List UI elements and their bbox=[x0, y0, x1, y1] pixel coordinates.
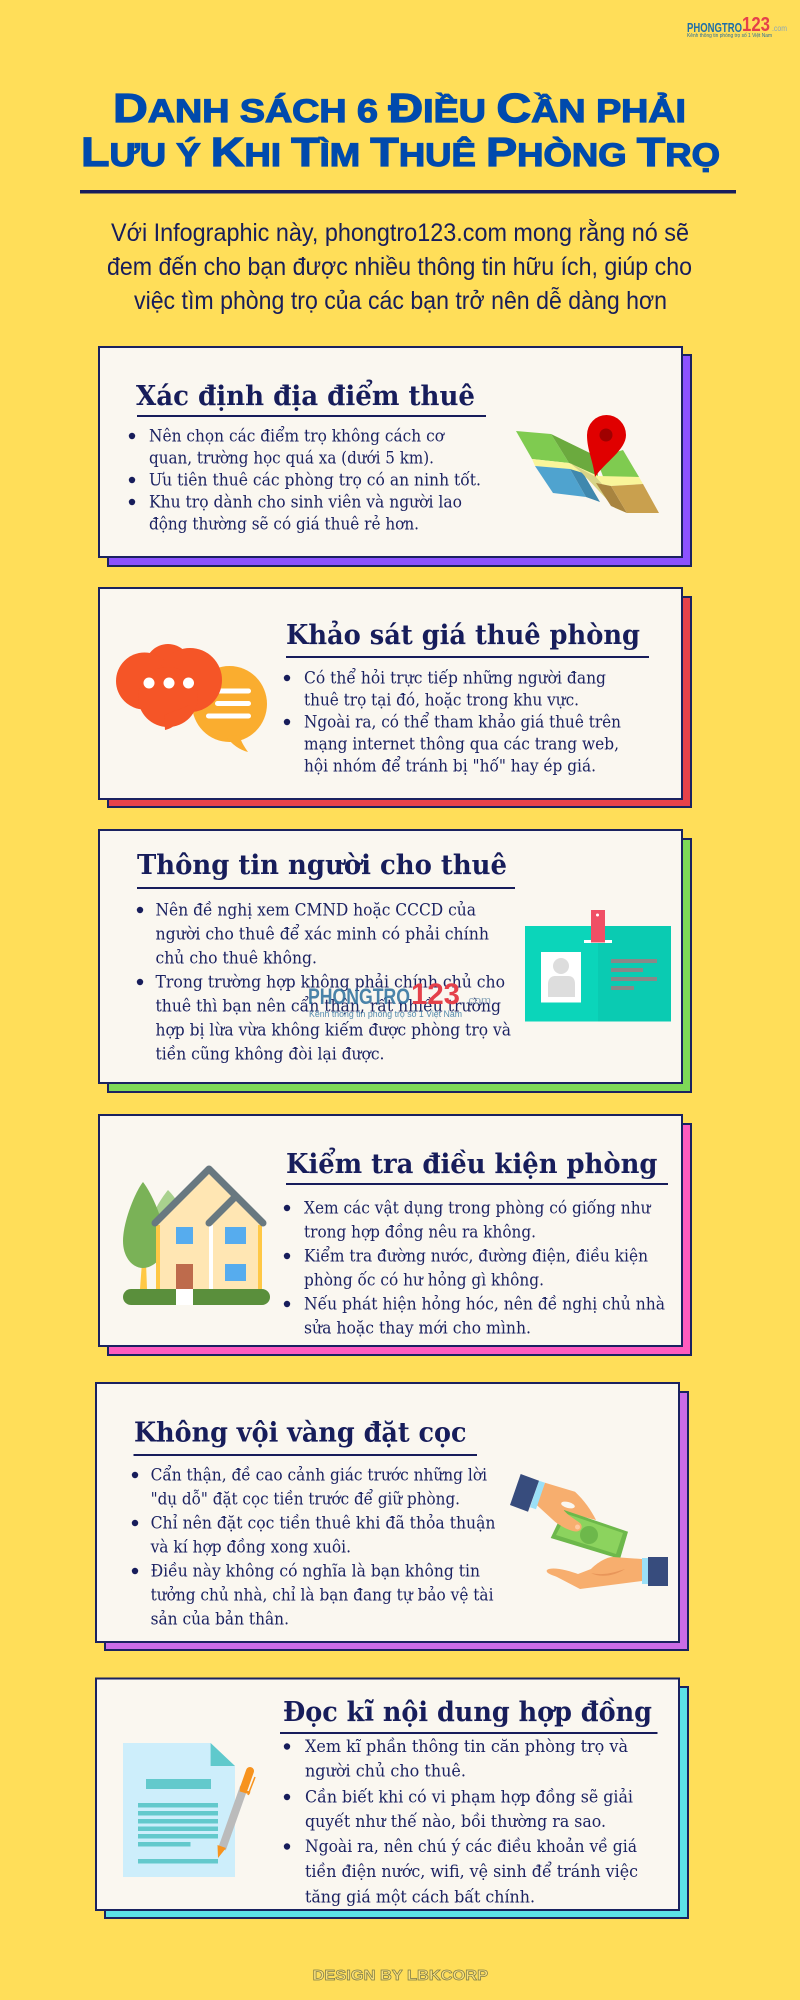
bullet list: Cần biết khi có vi phạm hợp đồng sẽ giải bbox=[305, 1788, 633, 1806]
heading: Không vội vàng đặt cọc bbox=[134, 1416, 466, 1448]
bullet list bbox=[132, 1466, 496, 1628]
bullet list: Ưu tiên thuê các phòng trọ có an ninh tốt. bbox=[149, 470, 481, 490]
watermark logo: .com bbox=[465, 995, 491, 1007]
icon: house bbox=[123, 1169, 270, 1305]
bullet list: Ngoài ra, nên chú ý các điều khoản về giá bbox=[305, 1837, 637, 1856]
bullet list: Nên chọn các điểm trọ không cách cơ bbox=[149, 426, 445, 446]
bullet list: mạng internet thông qua các trang web, bbox=[304, 734, 619, 754]
bullet list: thuê thì bạn nên cẩn thận, rất nhiều trường bbox=[156, 996, 501, 1016]
icon: map with pin bbox=[516, 415, 659, 513]
bullet list: quyết như thế nào, bồi thường ra sao. bbox=[305, 1812, 606, 1831]
bullet list: tiền cũng không đòi lại được. bbox=[156, 1044, 384, 1064]
bullet list: Xem các vật dụng trong phòng có giống như bbox=[304, 1198, 652, 1218]
intro text: việc tìm phòng trọ của các bạn trở nên dễ dàng hơn bbox=[134, 286, 667, 315]
panel: khảo sát giá thuê phòng bbox=[99, 588, 691, 807]
bullet list: tiền điện nước, wifi, vệ sinh để tránh việc bbox=[305, 1862, 638, 1881]
heading: Thông tin người cho thuê bbox=[137, 849, 507, 881]
bullet list: người chủ cho thuê. bbox=[305, 1762, 466, 1780]
bullet list: tưởng chủ nhà, chỉ là bạn đang tự bảo vệ tài bbox=[151, 1586, 494, 1604]
watermark logo bbox=[308, 978, 491, 1019]
panel: xác định địa điểm thuê bbox=[99, 347, 691, 566]
logo: phongtro123: PHONGTRO bbox=[687, 20, 742, 35]
logo: phongtro123: Kênh thông tin phòng trọ số 1 Việt Nam bbox=[687, 33, 772, 39]
panel: không vội vàng đặt cọc bbox=[96, 1383, 688, 1650]
bullet list: tăng giá một cách bất chính. bbox=[305, 1888, 535, 1906]
footer credit: DESIGN BY LBKCORP bbox=[313, 1967, 488, 1984]
panel: đọc kĩ nội dung hợp đồng bbox=[96, 1678, 688, 1918]
heading: Xác định địa điểm thuê bbox=[136, 378, 475, 412]
bullet list: Có thể hỏi trực tiếp những người đang bbox=[304, 668, 606, 688]
title bbox=[81, 85, 720, 175]
bullet list: và kí hợp đồng xong xuôi. bbox=[150, 1538, 351, 1556]
bullet list: Nên đề nghị xem CMND hoặc CCCD của bbox=[156, 900, 476, 920]
bullet list: động thường sẽ có giá thuê rẻ hơn. bbox=[149, 514, 419, 534]
watermark logo: 123 bbox=[411, 978, 460, 1011]
heading: Đọc kĩ nội dung hợp đồng bbox=[283, 1696, 652, 1728]
bullet list: thuê trọ tại đó, hoặc trong khu vực. bbox=[304, 690, 579, 710]
logo: phongtro123 bbox=[687, 14, 787, 39]
bullet list: sửa hoặc thay mới cho mình. bbox=[304, 1318, 531, 1338]
bullet list: Chỉ nên đặt cọc tiền thuê khi đã thỏa thuận bbox=[151, 1514, 496, 1532]
bullet list: trong hợp đồng nêu ra không. bbox=[304, 1222, 536, 1242]
logo: phongtro123: .com bbox=[772, 24, 787, 33]
intro text: đem đến cho bạn được nhiều thông tin hữu ích, giúp cho bbox=[107, 253, 692, 281]
bullet list bbox=[284, 1198, 665, 1338]
watermark logo: PHONGTRO bbox=[308, 984, 410, 1009]
icon: contract and pen bbox=[123, 1743, 255, 1877]
intro text: Với Infographic này, phongtro123.com mong rằng nó sẽ bbox=[111, 218, 689, 247]
logo: phongtro123: 123 bbox=[742, 14, 770, 36]
bullet list: Trong trường hợp không phải chính chủ cho bbox=[156, 972, 505, 992]
bullet list: Khu trọ dành cho sinh viên và người lao bbox=[149, 492, 462, 512]
bullet list: Nếu phát hiện hỏng hóc, nên đề nghị chủ nhà bbox=[304, 1294, 665, 1314]
bullet list bbox=[129, 426, 481, 534]
bullet list: Điều này không có nghĩa là bạn không tin bbox=[151, 1562, 480, 1580]
bullet list: "dụ dỗ" đặt cọc tiền trước để giữ phòng. bbox=[151, 1490, 460, 1508]
bullet list: Ngoài ra, có thể tham khảo giá thuê trên bbox=[304, 712, 621, 732]
icon: hands exchanging money bbox=[510, 1474, 668, 1589]
watermark logo: Kênh thông tin phòng trọ số 1 Việt Nam bbox=[309, 1009, 462, 1019]
bullet list bbox=[137, 900, 511, 1064]
bullet list: sản của bản thân. bbox=[151, 1610, 289, 1628]
heading: Kiểm tra điều kiện phòng bbox=[286, 1146, 658, 1180]
bullet list: phòng ốc có hư hỏng gì không. bbox=[304, 1270, 544, 1290]
bullet list: quan, trường học quá xa (dưới 5 km). bbox=[149, 448, 434, 468]
bullet list: Cẩn thận, đề cao cảnh giác trước những lời bbox=[151, 1466, 487, 1484]
icon: id card bbox=[525, 910, 671, 1022]
bullet list: hợp bị lừa vừa không kiếm được phòng trọ và bbox=[156, 1020, 511, 1040]
intro text bbox=[107, 218, 692, 315]
bullet list bbox=[284, 1737, 638, 1906]
bullet list: chủ cho thuê không. bbox=[156, 948, 317, 968]
bullet list: hội nhóm để tránh bị "hố" hay ép giá. bbox=[304, 756, 596, 776]
title: LƯU Ý KHI TÌM THUÊ PHÒNG TRỌ bbox=[81, 129, 720, 175]
panel: thông tin người cho thuê bbox=[99, 830, 691, 1092]
icon: chat bubbles bbox=[116, 644, 267, 752]
bullet list: người cho thuê để xác minh có phải chính bbox=[156, 924, 489, 944]
bullet list: Xem kĩ phần thông tin căn phòng trọ và bbox=[305, 1737, 628, 1756]
heading: Khảo sát giá thuê phòng bbox=[286, 619, 640, 651]
bullet list bbox=[284, 668, 621, 776]
title: DANH SÁCH 6 ĐIỀU CẦN PHẢI bbox=[113, 85, 686, 131]
panel: kiểm tra điều kiện phòng bbox=[99, 1115, 691, 1355]
bullet list: Kiểm tra đường nước, đường điện, điều kiện bbox=[304, 1246, 648, 1266]
